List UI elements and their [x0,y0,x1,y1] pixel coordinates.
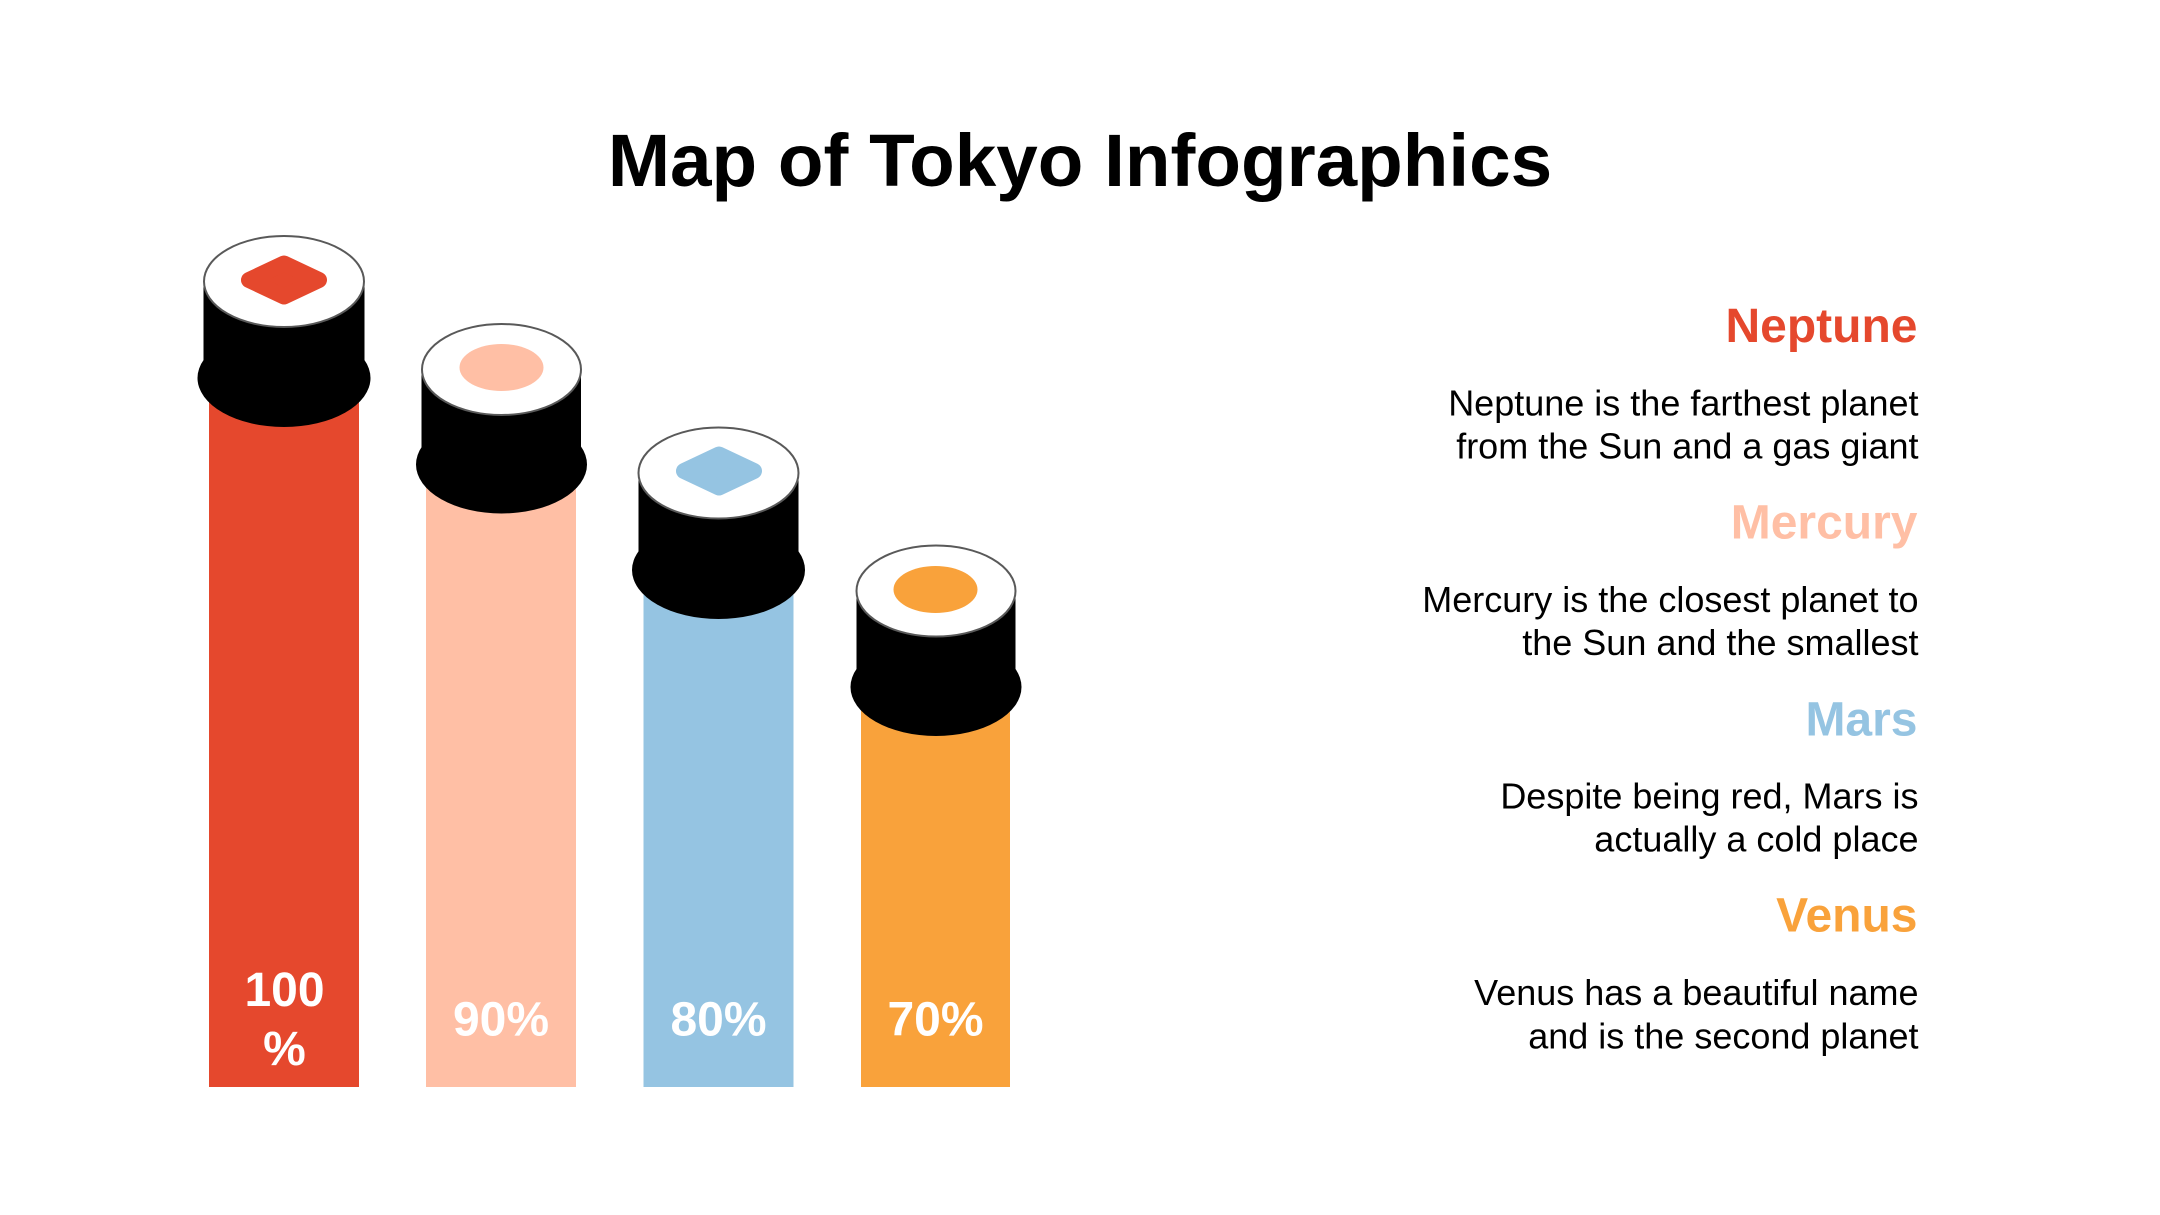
bar: Mercury 90%: 90% [453,994,549,1046]
text block: Venus: Venus [1776,890,1918,942]
bar: Mars 80% [644,570,794,1087]
text block: Venus [1474,890,1918,1056]
text block: Mars [1500,693,1918,860]
bar: Neptune 100% [209,370,359,1087]
text block: Venus: and is the second planet [1528,1015,1918,1056]
icon: sushi roll on Neptune bar [198,236,370,427]
icon: sushi roll on Mercury bar [416,324,587,514]
text block: Mars: Mars [1805,693,1918,746]
bar: Neptune 100%: 100 [244,964,325,1017]
bar: Neptune 100%: % [263,1023,306,1076]
text block: Mars: Despite being red, Mars is [1500,775,1918,816]
text block: Neptune: Neptune [1726,300,1918,353]
bar: Venus 70% [861,690,1010,1087]
icon: sushi roll on Venus bar [850,546,1022,736]
text block: Mercury: Mercury is the closest planet to [1422,579,1918,620]
panel: bar chart [198,236,1022,1087]
icon: sushi roll on Mars bar [632,428,805,619]
bar: Mercury 90% [426,460,576,1087]
text block: Venus: Venus has a beautiful name [1474,972,1918,1013]
bar: Venus 70%: 70% [887,994,984,1046]
text block: Mars: actually a cold place [1594,819,1918,860]
text block: Mercury [1422,497,1918,663]
bar: Mars 80%: 80% [670,994,767,1046]
text block: Neptune: Neptune is the farthest planet [1448,382,1918,424]
text block: Neptune [1448,300,1918,466]
text block: Neptune: from the Sun and a gas giant [1456,426,1918,466]
text block: Mercury: the Sun and the smallest [1522,622,1918,663]
panel: legend text [1422,300,1918,1056]
text block: Mercury: Mercury [1731,497,1918,550]
title: Map of Tokyo Infographics [608,118,1552,202]
